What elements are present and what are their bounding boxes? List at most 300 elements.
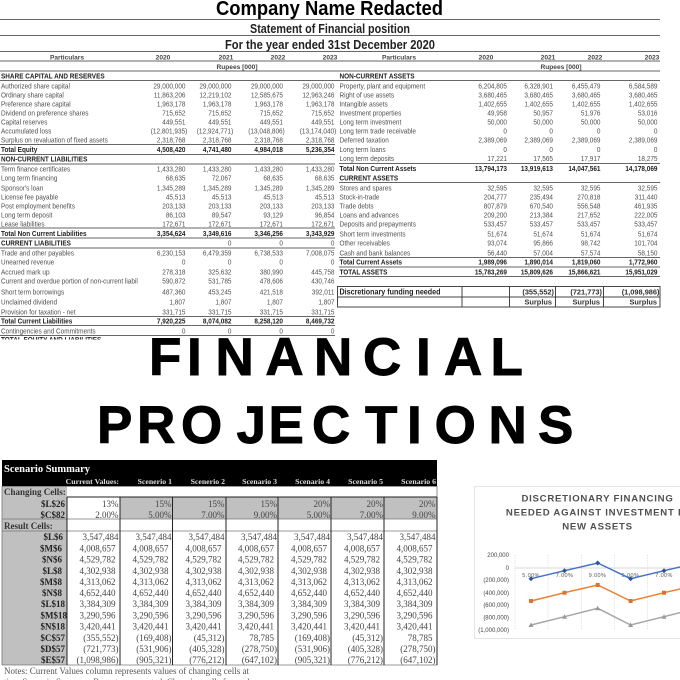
left table column 2020: 1,433,280 xyxy=(157,166,186,174)
left table row labels: TOTAL EQUITY AND LIABILITIES xyxy=(1,337,102,344)
left table row labels: NON-CURRENT LIABILITIES xyxy=(1,156,88,164)
left table row labels: Dividend on preference shares xyxy=(1,110,89,118)
row labels: $L$26 xyxy=(41,499,65,509)
current values column: (721,773) xyxy=(83,644,118,654)
callout: discretionary funding needed: Discretionary funding needed xyxy=(340,288,441,296)
left table column 2022: 172,671 xyxy=(260,221,283,229)
right table column 2020: 209,200 xyxy=(484,212,507,220)
left table column 2021: 2,318,768 xyxy=(203,137,232,145)
right table column 2021: 95,866 xyxy=(533,240,553,248)
callout: discretionary funding needed: (1,098,986) xyxy=(622,288,660,296)
right table column 2020: 56,440 xyxy=(487,250,507,258)
right table column 2023 xyxy=(625,83,658,277)
right table column 2020: 93,074 xyxy=(487,240,507,248)
left table column 2021: 1,963,178 xyxy=(203,101,232,109)
left table column 2023: 7,008,075 xyxy=(306,250,335,258)
row labels: $C$82 xyxy=(40,510,65,520)
scenario 5 column: 4,313,062 xyxy=(344,577,380,587)
series: blue line xyxy=(528,560,680,581)
left table column 2022: 380,990 xyxy=(260,269,283,277)
right table column 2021: 1,402,655 xyxy=(524,101,553,109)
right table column 2023: 101,704 xyxy=(634,240,658,248)
row labels: $D$57 xyxy=(40,644,65,654)
left table column 2022: 93,129 xyxy=(263,212,283,220)
scenario 6 column: 4,008,657 xyxy=(396,544,433,554)
left table column 2020: 331,715 xyxy=(162,309,186,317)
scenario 3 column: (278,750) xyxy=(242,644,277,654)
left table row labels: Provision for taxation - net xyxy=(1,309,76,317)
left table column 2021: 4,741,480 xyxy=(203,147,232,154)
right table row labels xyxy=(340,73,425,277)
panel: statement of financial position xyxy=(0,0,660,344)
section labels: Changing Cells: xyxy=(4,487,66,497)
scenario 3 column: 4,302,938 xyxy=(238,566,274,576)
y axis labels: 0 xyxy=(506,566,510,572)
left table row labels: Sponsor's loan xyxy=(1,185,43,193)
right table column 2020: 0 xyxy=(503,147,507,154)
left table row labels: SHARE CAPITAL AND RESERVES xyxy=(1,73,105,81)
scenario 1 column: 4,302,938 xyxy=(132,566,169,576)
current values column: (355,552) xyxy=(83,633,118,643)
scenario column headers: Scenerio 2 xyxy=(191,477,225,486)
right table column 2020 xyxy=(475,83,507,277)
left table column 2021: 72,067 xyxy=(212,175,232,183)
right table column 2022: 217,652 xyxy=(577,212,601,220)
scenario 4 column: (531,906) xyxy=(295,644,330,654)
left table row labels: Unclaimed dividend xyxy=(1,299,57,307)
right table column 2021: 15,809,626 xyxy=(521,269,553,277)
scenario 1 column: 4,529,782 xyxy=(132,554,168,564)
left table column 2021: 172,671 xyxy=(208,221,232,229)
callout: discretionary funding needed: Surplus xyxy=(572,298,600,306)
right table column 2021: 0 xyxy=(549,128,553,136)
left table column 2021: 89,547 xyxy=(212,212,232,220)
right table column 2020: 1,989,096 xyxy=(478,259,507,267)
left table column 2021: 45,513 xyxy=(212,194,232,202)
left table column 2022: 1,963,178 xyxy=(254,101,283,109)
scenario 5 column xyxy=(344,499,384,665)
scenario 2 column: 3,384,309 xyxy=(186,599,222,609)
right table column 2023: 311,440 xyxy=(635,194,658,202)
left table row labels: Trade and other payables xyxy=(1,250,74,258)
left table column 2023: (13,174,040) xyxy=(300,128,336,136)
scenario 4 column: 3,420,441 xyxy=(291,622,327,632)
right table column 2021: 3,680,465 xyxy=(524,92,553,100)
right table column 2022: 6,455,479 xyxy=(572,83,601,91)
scenario 6 column: (278,750) xyxy=(400,644,436,654)
scenario column headers: Scenario 3 xyxy=(242,477,277,486)
left table row labels: Lease liabilities xyxy=(1,221,45,229)
right table column 2022: 57,574 xyxy=(581,250,601,258)
right table column 2022: 15,866,621 xyxy=(568,269,601,277)
y axis labels: (200,000) xyxy=(483,578,509,584)
x axis labels: 9.00% xyxy=(589,573,606,579)
scenario 2 column: 4,302,938 xyxy=(186,566,222,576)
scenario 4 column: 3,290,596 xyxy=(291,610,328,620)
scenario column headers: Scenario 4 xyxy=(295,477,330,486)
right table column 2023: 58,150 xyxy=(638,250,658,258)
left table column 2023: 445,758 xyxy=(311,269,335,277)
scenario 1 column: 3,384,309 xyxy=(132,599,169,609)
right table column 2021: 2,389,069 xyxy=(524,137,553,145)
right table column 2020: 0 xyxy=(503,128,507,136)
current values column xyxy=(76,499,119,665)
scenario 6 column: 4,313,062 xyxy=(396,577,432,587)
scenario 5 column: 7.00% xyxy=(360,510,384,520)
left table column 2020: 86,103 xyxy=(166,212,186,220)
right table column 2021: 32,595 xyxy=(533,185,553,193)
right table column 2022 xyxy=(568,83,601,277)
right table column 2020: 15,783,269 xyxy=(475,269,507,277)
left table column 2020: (12,801,935) xyxy=(151,128,187,136)
left table row labels: CURRENT LIABILITIES xyxy=(1,240,71,248)
left table column 2023: 172,671 xyxy=(311,221,335,229)
current values column: 3,547,484 xyxy=(82,532,119,542)
left table column 2022: 29,000,000 xyxy=(251,83,283,91)
left table row labels: Long term deposit xyxy=(1,212,53,220)
right table column 2022: 50,000 xyxy=(581,119,601,127)
scenario 6 column: 3,420,441 xyxy=(396,622,432,632)
left table column 2022: 0 xyxy=(279,240,283,248)
y axis labels: (1,000,000) xyxy=(478,628,509,634)
chart title: DISCRETIONARY FINANCING xyxy=(521,494,674,504)
scenario 5 column: 3,547,484 xyxy=(347,532,384,542)
left table column 2022: 203,133 xyxy=(260,203,283,211)
left table column 2022: 1,433,280 xyxy=(254,166,283,174)
row labels: $M$6 xyxy=(40,544,62,554)
left table column 2022: 449,551 xyxy=(260,119,283,127)
row labels: $M$8 xyxy=(40,577,62,587)
current values column: 3,290,596 xyxy=(80,610,116,620)
right table column 2020: 1,402,655 xyxy=(478,101,507,109)
scenario 1 column: 15% xyxy=(155,499,172,509)
left table column 2023: 331,715 xyxy=(311,309,335,317)
notes: Notes: Current Values column represents values of changing cells at xyxy=(4,666,250,676)
scenario 2 column xyxy=(186,499,225,665)
right table column 2021: 50,957 xyxy=(533,110,553,118)
left table column 2023: 1,345,289 xyxy=(306,185,335,193)
left table row labels: Unearned revenue xyxy=(1,259,54,267)
scenario 6 column: 3,547,484 xyxy=(400,532,436,542)
right table row labels: Total Current Assets xyxy=(340,259,402,267)
scenario column headers xyxy=(66,477,436,486)
left table column 2020: 2,318,768 xyxy=(157,137,186,145)
left table column 2021: 29,000,000 xyxy=(199,83,232,91)
column headers: right table: 2020 xyxy=(479,54,494,62)
left table column 2023: 12,963,246 xyxy=(302,92,335,100)
left table column 2021: 1,345,289 xyxy=(203,185,232,193)
column headers: right table xyxy=(382,54,660,71)
callout: discretionary funding needed: (721,773) xyxy=(570,288,603,296)
left table column 2022: 4,984,018 xyxy=(254,147,283,154)
left table column 2023: 96,854 xyxy=(315,212,335,220)
left table column 2022: 45,513 xyxy=(263,194,283,202)
scenario 5 column: 3,290,596 xyxy=(344,610,380,620)
scenario column headers: Scenario 6 xyxy=(401,477,436,486)
left table row labels: Term finance certificates xyxy=(1,166,71,174)
scenario 2 column: 4,008,657 xyxy=(186,544,222,554)
column headers: right table: 2022 xyxy=(588,54,603,62)
current values column: 4,008,657 xyxy=(80,544,116,554)
left table column 2021: (12,924,771) xyxy=(197,128,233,136)
left table column 2020: 1,345,289 xyxy=(157,185,186,193)
left table row labels: Authorized share capital xyxy=(1,83,70,91)
left table row labels: Long term financing xyxy=(1,175,58,183)
row labels: $L$8 xyxy=(42,566,62,576)
callout: discretionary funding needed: Surplus xyxy=(629,298,657,306)
left table column 2022: 421,518 xyxy=(260,289,283,297)
chart title xyxy=(506,494,680,532)
left table column 2022: (13,048,806) xyxy=(248,128,285,136)
left table column 2021: 12,219,102 xyxy=(199,92,232,100)
scenario 3 column: 3,384,309 xyxy=(238,599,274,609)
right table column 2023: 533,457 xyxy=(634,221,658,229)
scenario 1 column xyxy=(132,499,172,665)
right table row labels: Deferred taxation xyxy=(340,137,389,145)
left table column 2023: 2,318,768 xyxy=(306,137,335,145)
right table column 2023: 1,402,655 xyxy=(629,101,658,109)
right table column 2020: 6,204,805 xyxy=(478,83,507,91)
right table row labels: Stores and spares xyxy=(340,185,392,193)
scenario 2 column: (776,212) xyxy=(189,655,224,665)
right table column 2023: 461,935 xyxy=(634,203,658,211)
scenario 3 column: 3,420,441 xyxy=(238,622,274,632)
right table column 2022: 533,457 xyxy=(577,221,601,229)
heading: FINANCIAL: FINANCIAL xyxy=(149,328,523,387)
right table column 2020: 533,457 xyxy=(484,221,507,229)
left table column 2023: 1,433,280 xyxy=(306,166,335,174)
left table column 2020: 172,671 xyxy=(162,221,186,229)
scenario 3 column: 78,785 xyxy=(249,633,274,643)
x axis labels: 5.00% xyxy=(622,573,639,579)
scenario 3 column: (647,102) xyxy=(242,655,277,665)
right table column 2021: 17,565 xyxy=(533,156,553,163)
right table column 2021: 670,540 xyxy=(530,203,553,211)
column headers: right table: 2021 xyxy=(541,54,556,62)
chart title: NEW ASSETS xyxy=(562,522,633,532)
left table column 2021: 325,632 xyxy=(208,269,232,277)
right table column 2023: 6,584,589 xyxy=(629,83,658,91)
column headers: left table xyxy=(50,54,338,71)
scenario 2 column: 4,529,782 xyxy=(186,554,222,564)
scenario 5 column: (45,312) xyxy=(352,633,383,643)
left table row labels: Total Equity xyxy=(1,147,37,154)
current values column: 2.00% xyxy=(95,510,119,520)
current values column: 3,420,441 xyxy=(80,622,116,632)
current values column: (1,098,986) xyxy=(76,655,118,665)
row labels: $M$18 xyxy=(40,610,67,620)
scenario 2 column: 4,313,062 xyxy=(186,577,222,587)
scenario 4 column: 4,313,062 xyxy=(291,577,327,587)
heading: PROJECTIONS: PROJECTIONS xyxy=(97,396,573,455)
row labels: $N$6 xyxy=(42,554,62,564)
callout: discretionary funding needed xyxy=(338,286,660,307)
right table column 2023: 51,674 xyxy=(638,231,658,239)
y axis labels: (800,000) xyxy=(483,616,509,622)
scenario 4 column: (905,321) xyxy=(295,655,330,665)
scenario 2 column: 3,420,441 xyxy=(186,622,222,632)
scenario 6 column: 3,290,596 xyxy=(396,610,433,620)
left table row labels: Surplus on revaluation of fixed assets xyxy=(1,137,108,145)
right table column 2023: 0 xyxy=(654,147,658,154)
scenario 5 column: (405,328) xyxy=(348,644,383,654)
right table row labels: Trade debts xyxy=(340,203,374,211)
left table column 2020: 68,635 xyxy=(166,175,186,183)
right table row labels: CURRENT ASSETS xyxy=(340,175,399,183)
right table column 2023: 222,005 xyxy=(634,212,658,220)
right table row labels: Property, plant and equipment xyxy=(340,83,425,91)
left table column 2022: 331,715 xyxy=(260,309,283,317)
left table column 2023: 1,963,178 xyxy=(306,101,335,109)
scenario 5 column: 3,420,441 xyxy=(344,622,380,632)
right table column 2023: 18,275 xyxy=(638,156,658,163)
right table column 2020: 32,595 xyxy=(487,185,507,193)
left table column 2023: 1,807 xyxy=(318,299,335,307)
right table column 2022: 51,976 xyxy=(581,110,601,118)
y axis labels: (400,000) xyxy=(483,591,509,597)
left table row labels: Total Non Current Liabilities xyxy=(1,231,87,238)
section labels xyxy=(4,487,66,531)
left table column 2023: 8,469,732 xyxy=(306,318,335,326)
left table row labels: Post employment benefits xyxy=(1,203,75,211)
left table column 2021: 715,652 xyxy=(208,110,232,118)
scenario 4 column: 4,302,938 xyxy=(291,566,328,576)
left table row labels: Accrued mark up xyxy=(1,269,50,277)
callout: discretionary funding needed: (355,552) xyxy=(522,288,555,296)
right table column 2021: 50,000 xyxy=(533,119,553,127)
left table column 2020: 449,551 xyxy=(162,119,186,127)
column headers: left table: 2021 xyxy=(219,54,234,62)
left table row labels: Capital reserves xyxy=(1,119,48,127)
right table column 2023: 14,178,069 xyxy=(625,166,658,173)
right table row labels: TOTAL ASSETS xyxy=(340,269,388,277)
row labels xyxy=(40,499,67,665)
left table column 2023: 0 xyxy=(331,328,335,336)
current values column: 3,384,309 xyxy=(80,599,116,609)
left table row labels: Preference share capital xyxy=(1,101,71,109)
right table column 2022: 98,742 xyxy=(581,240,601,248)
left table column 2022: 1,345,289 xyxy=(254,185,283,193)
y axis labels xyxy=(478,553,510,634)
panel: discretionary financing line chart xyxy=(474,486,680,638)
left table column 2021: 0 xyxy=(228,240,232,248)
subtitle: statement: Statement of Financial position xyxy=(250,21,410,36)
right table row labels: Stock-in-trade xyxy=(340,194,380,202)
right table column 2020: 3,680,465 xyxy=(478,92,507,100)
right table column 2022: 3,680,465 xyxy=(572,92,601,100)
right table column 2023: 1,772,960 xyxy=(629,259,658,267)
left table column 2023: 715,652 xyxy=(311,110,335,118)
left table row labels: Contingencies and Commitments xyxy=(1,328,96,336)
left table column 2020: 590,872 xyxy=(162,278,186,286)
scenario 1 column: 4,652,440 xyxy=(132,588,169,598)
x axis labels: 7.00% xyxy=(655,573,673,579)
right table column 2022: 270,818 xyxy=(577,194,601,202)
row labels: $L$6 xyxy=(43,532,63,542)
right table column 2020: 2,389,069 xyxy=(478,137,507,145)
left table column 2021: 6,479,359 xyxy=(203,250,232,258)
scenario 2 column: 7.00% xyxy=(201,510,225,520)
scenario 6 column xyxy=(396,499,436,665)
right table column 2021: 1,890,014 xyxy=(524,259,553,267)
scenario 1 column: 3,547,484 xyxy=(136,532,172,542)
y axis labels: (600,000) xyxy=(483,603,509,609)
left table column 2020 xyxy=(151,83,187,336)
scenario 1 column: (531,906) xyxy=(136,644,172,654)
left table column 2020: 1,963,178 xyxy=(157,101,186,109)
right table column 2022: 51,674 xyxy=(581,231,601,239)
right table row labels: Long term deposits xyxy=(340,156,395,163)
scenario 1 column: (905,321) xyxy=(136,655,172,665)
scenario 1 column: 5.00% xyxy=(148,510,172,520)
row labels: $L$18 xyxy=(41,599,65,609)
left table column 2022: 2,318,768 xyxy=(254,137,283,145)
left table column 2022 xyxy=(248,83,285,336)
scenario column headers: Current Values: xyxy=(66,477,119,486)
left table column 2020: 45,513 xyxy=(166,194,186,202)
left table column 2021: 0 xyxy=(228,328,232,336)
x axis labels: 7.00% xyxy=(556,573,573,579)
right table column 2021: 6,328,901 xyxy=(524,83,553,91)
x axis labels xyxy=(522,573,673,579)
right table column 2020: 50,000 xyxy=(487,119,507,127)
left table column 2022: 478,606 xyxy=(260,278,283,286)
scenario 6 column: 4,652,440 xyxy=(396,588,433,598)
right table column 2020: 51,674 xyxy=(487,231,507,239)
scenario 4 column xyxy=(291,499,330,665)
left table column 2023: 5,236,354 xyxy=(306,147,335,154)
left table row labels: Total Current Liabilities xyxy=(1,318,72,326)
left table column 2022: 1,807 xyxy=(267,299,283,307)
scenario 4 column: 3,547,484 xyxy=(294,532,330,542)
left table row labels xyxy=(1,73,138,344)
right table column 2023: 2,389,069 xyxy=(629,137,658,145)
scenario 1 column: 4,008,657 xyxy=(132,544,169,554)
scenario 3 column: 4,313,062 xyxy=(238,577,274,587)
right table column 2021: 533,457 xyxy=(530,221,553,229)
scenario 4 column: 5.00% xyxy=(307,510,330,520)
scenario 4 column: 4,008,657 xyxy=(291,544,328,554)
left table row labels: License fee payable xyxy=(1,194,58,202)
column headers: left table: Rupees [000] xyxy=(216,64,258,71)
right table column 2023: 32,595 xyxy=(638,185,658,193)
right table row labels: Other receivables xyxy=(340,240,390,248)
scenario 4 column: 4,652,440 xyxy=(291,588,328,598)
right table row labels: Cash and bank balances xyxy=(340,250,411,258)
right table column 2022: 17,917 xyxy=(581,156,601,163)
column headers: left table: 2022 xyxy=(271,54,286,62)
scenario 3 column: 9.00% xyxy=(254,510,278,520)
right table row labels: Investment properties xyxy=(340,110,402,118)
panel: scenario summary table xyxy=(2,460,437,680)
left table column 2020: 7,920,225 xyxy=(157,318,186,326)
subtitle: period: For the year ended 31st December 2020 xyxy=(225,37,435,52)
scenario 5 column: (776,212) xyxy=(348,655,383,665)
left table column 2022: 8,258,120 xyxy=(254,318,283,326)
scenario 3 column: 15% xyxy=(260,499,278,509)
scenario 4 column: 3,384,309 xyxy=(291,599,328,609)
left table column 2020: 0 xyxy=(182,259,186,267)
column headers: right table: Particulars xyxy=(382,54,416,62)
current values column: 4,529,782 xyxy=(80,554,116,564)
right table column 2022: 14,047,561 xyxy=(568,166,601,173)
left table row labels: Current and overdue portion of non-current liabil xyxy=(1,278,138,286)
scenario 2 column: 4,652,440 xyxy=(186,588,222,598)
right table column 2023: 15,951,029 xyxy=(625,269,658,277)
left table column 2021: 203,133 xyxy=(208,203,232,211)
right table column 2023: 0 xyxy=(654,128,658,136)
right table column 2021 xyxy=(521,83,553,277)
